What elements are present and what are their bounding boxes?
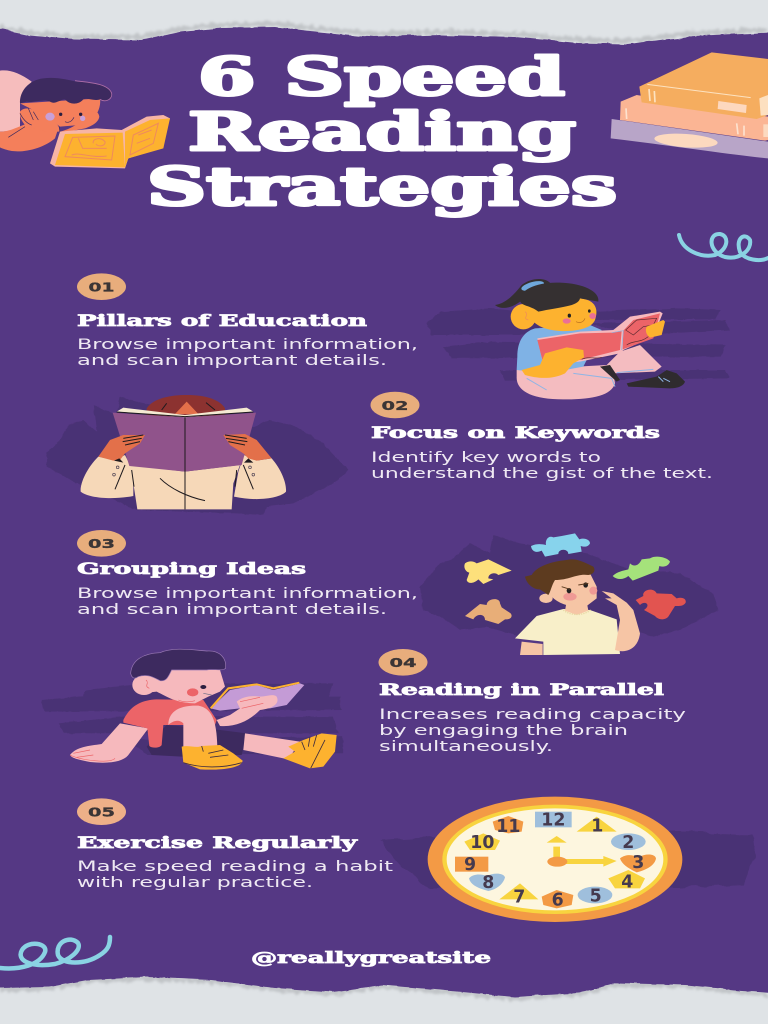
text block 3 (77, 586, 418, 618)
illustration: girl reading a red book (495, 279, 685, 399)
text block 5: with regular practice. (77, 875, 313, 891)
illustration: clock: 2 (622, 833, 634, 853)
text block 2 (371, 450, 713, 482)
illustration: clock: 8 (482, 873, 494, 893)
title: Strategies (147, 157, 617, 218)
badge 04 (378, 649, 428, 676)
illustration: stack of books (611, 52, 768, 158)
illustration: clock: 3 (632, 853, 644, 873)
step 3 (77, 530, 718, 655)
step 1 (77, 273, 729, 399)
illustration: child reading lying down (0, 70, 170, 168)
text block 5: Make speed reading a habit (77, 859, 394, 875)
badge 05: 05 (88, 804, 115, 820)
brush behind girl (426, 308, 729, 381)
heading 4: Reading in Parallel (379, 680, 664, 699)
badge 02: 02 (382, 398, 408, 413)
text block 5 (77, 859, 394, 891)
illustration: person behind an open purple book (47, 395, 348, 515)
step 5 (77, 797, 755, 922)
title: 6 Speed (198, 47, 565, 108)
badge 02 (370, 392, 420, 418)
illustration: clock: 4 (621, 872, 633, 892)
illustration: clock: 1 (591, 816, 603, 836)
heading 5: Exercise Regularly (77, 833, 359, 852)
illustration: clock: 6 (552, 891, 564, 911)
heading 3: Grouping Ideas (77, 559, 306, 578)
title (147, 47, 617, 218)
illustration: boy sitting and reading (70, 649, 337, 770)
text block 4 (379, 707, 686, 755)
brush behind clock (380, 832, 755, 888)
illustration: clock (428, 797, 682, 922)
decorative swirl: top right (679, 234, 768, 260)
illustration: clock: 10 (470, 833, 494, 853)
text block 3: Browse important information, (77, 586, 418, 602)
badge 04: 04 (390, 655, 417, 670)
heading 1: Pillars of Education (77, 311, 367, 330)
text block 1 (77, 337, 418, 369)
illustration: clock: 12 (541, 811, 565, 831)
title: Reading (188, 102, 576, 163)
illustration: clock: 9 (464, 855, 476, 875)
heading 2: Focus on Keywords (371, 423, 660, 442)
text block 4: by engaging the brain (379, 723, 628, 739)
text block 1: and scan important details. (77, 353, 387, 369)
text block 4: Increases reading capacity (379, 707, 686, 723)
illustration: clock: 7 (513, 887, 525, 907)
step 2 (47, 392, 713, 515)
text block 3: and scan important details. (77, 602, 387, 618)
badge 01 (77, 273, 126, 300)
decorative swirl: bottom left (0, 937, 110, 968)
badge 03 (77, 530, 126, 557)
text block 2: understand the gist of the text. (371, 466, 713, 482)
handle text: @reallygreatsite (251, 948, 491, 967)
badge 05 (77, 798, 126, 825)
step 4 (42, 649, 686, 770)
brush behind sitting boy (42, 683, 343, 755)
illustration: clock: 11 (496, 817, 520, 837)
text block 2: Identify key words to (371, 450, 601, 466)
illustration: boy thinking with puzzle pieces (420, 533, 718, 655)
badge 01: 01 (88, 280, 114, 294)
text block 1: Browse important information, (77, 337, 418, 353)
badge 03: 03 (88, 536, 115, 551)
text block 4: simultaneously. (379, 739, 553, 755)
illustration: clock: 5 (590, 886, 602, 906)
